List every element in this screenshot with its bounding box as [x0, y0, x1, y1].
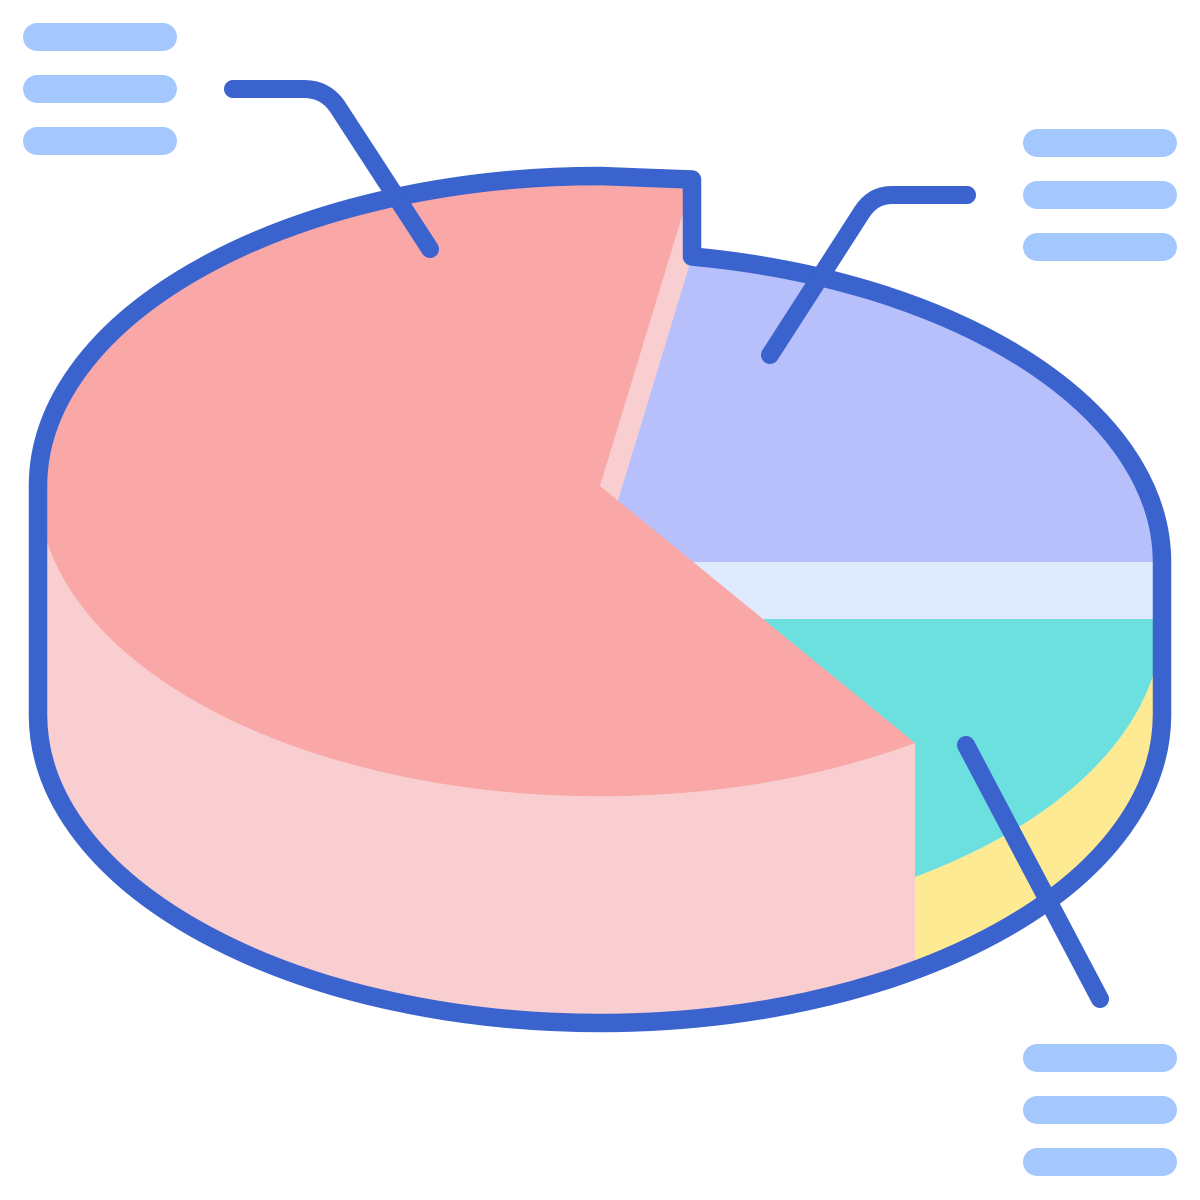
legend: top left placeholder lines [23, 23, 177, 155]
pie slice: yellow side wall [915, 620, 1162, 970]
legend: top right placeholder lines [1023, 129, 1177, 261]
pie slice: pink side wall [38, 486, 915, 1023]
pie slice: cut face highlight [600, 205, 692, 505]
leader line: red slice [233, 89, 430, 249]
pie outline [38, 176, 1162, 1023]
pie slice: teal top face [750, 619, 1162, 877]
leader line: lavender slice [770, 195, 967, 355]
pie slice: pale blue side wall [680, 562, 1162, 619]
leader line: teal slice [966, 745, 1100, 999]
pie slice: red top face [38, 176, 915, 796]
legend: bottom right placeholder lines [1023, 1044, 1177, 1176]
pie slice: lavender top face [610, 256, 1162, 562]
